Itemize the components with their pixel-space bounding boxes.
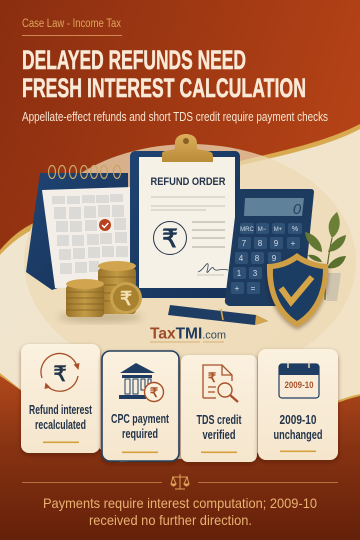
icon: clip xyxy=(162,134,213,162)
illustration: clipboard refund order: REFUND ORDER xyxy=(150,176,226,188)
footer divider with scales icon xyxy=(22,474,338,489)
card: TDS credit verified: verified xyxy=(202,428,236,442)
illustration: calculator xyxy=(225,189,314,306)
icon: document with magnifier: ₹ xyxy=(208,370,217,385)
title: DELAYED REFUNDS NEED xyxy=(22,45,246,75)
footer text xyxy=(43,495,317,528)
illustration: calculator: + xyxy=(235,284,240,293)
illustration: calculator: = xyxy=(251,284,256,293)
card: CPC payment required xyxy=(102,351,179,461)
illustration: calculator: 9 xyxy=(272,254,277,263)
footer text: received no further direction. xyxy=(89,512,252,528)
icon: calendar 2009-10: 2009-10 xyxy=(284,380,314,390)
illustration: calculator: 3 xyxy=(253,269,258,278)
illustration: shield xyxy=(267,253,328,327)
illustration: calculator: 7 xyxy=(242,239,247,248)
footer text: Payments require interest computation; 2009-10 xyxy=(43,495,317,511)
illustration: calculator: 1 xyxy=(237,269,242,278)
icon: rupee refresh: ₹ xyxy=(53,363,67,386)
logo: TaxTMI.com: TMI.com xyxy=(176,326,226,342)
illustration: calculator: 0 xyxy=(293,201,302,218)
illustration: calculator: % xyxy=(292,226,298,233)
card: 2009-10 unchanged: 2009-10 xyxy=(280,413,317,427)
card: CPC payment required: required xyxy=(122,427,158,441)
card: 2009-10 unchanged: unchanged xyxy=(274,428,322,442)
card: Refund interest recalculated: Refund interest xyxy=(29,403,93,417)
card: Refund interest recalculated xyxy=(21,344,100,453)
card: 2009-10 unchanged xyxy=(258,349,338,460)
icon: bank with rupee: ₹ xyxy=(150,385,159,400)
card: Refund interest recalculated: recalculated xyxy=(35,418,86,432)
eyebrow: Case Law - Income Tax: Case Law - Income Tax xyxy=(22,18,121,30)
illustration: rupee coins: ₹ xyxy=(120,289,132,310)
card: TDS credit verified: TDS credit xyxy=(196,413,242,427)
title xyxy=(22,45,306,103)
illustration: calculator: M+ xyxy=(274,227,283,233)
logo: TaxTMI.com xyxy=(150,326,226,342)
illustration: calculator: 8 xyxy=(258,239,263,248)
illustration: calculator: MRC xyxy=(240,227,254,233)
card: CPC payment required: CPC payment xyxy=(111,412,170,426)
logo: TaxTMI.com: Tax xyxy=(150,326,176,342)
illustration: plant xyxy=(305,212,346,301)
illustration: calculator: 9 xyxy=(274,239,279,248)
illustration: rupee coins xyxy=(58,261,142,322)
illustration: clipboard refund order: ₹ xyxy=(162,225,178,253)
illustration: pen xyxy=(168,305,268,325)
card: TDS credit verified xyxy=(181,355,257,462)
illustration: clipboard refund order xyxy=(130,134,240,298)
illustration: calculator: M− xyxy=(258,227,267,233)
icon: scales of justice xyxy=(171,474,189,489)
eyebrow: Case Law - Income Tax xyxy=(22,18,122,36)
illustration: calculator: + xyxy=(291,239,296,248)
illustration: calculator: 8 xyxy=(255,254,260,263)
illustration: calculator: 4 xyxy=(239,254,244,263)
illustration: calendar xyxy=(26,166,131,290)
